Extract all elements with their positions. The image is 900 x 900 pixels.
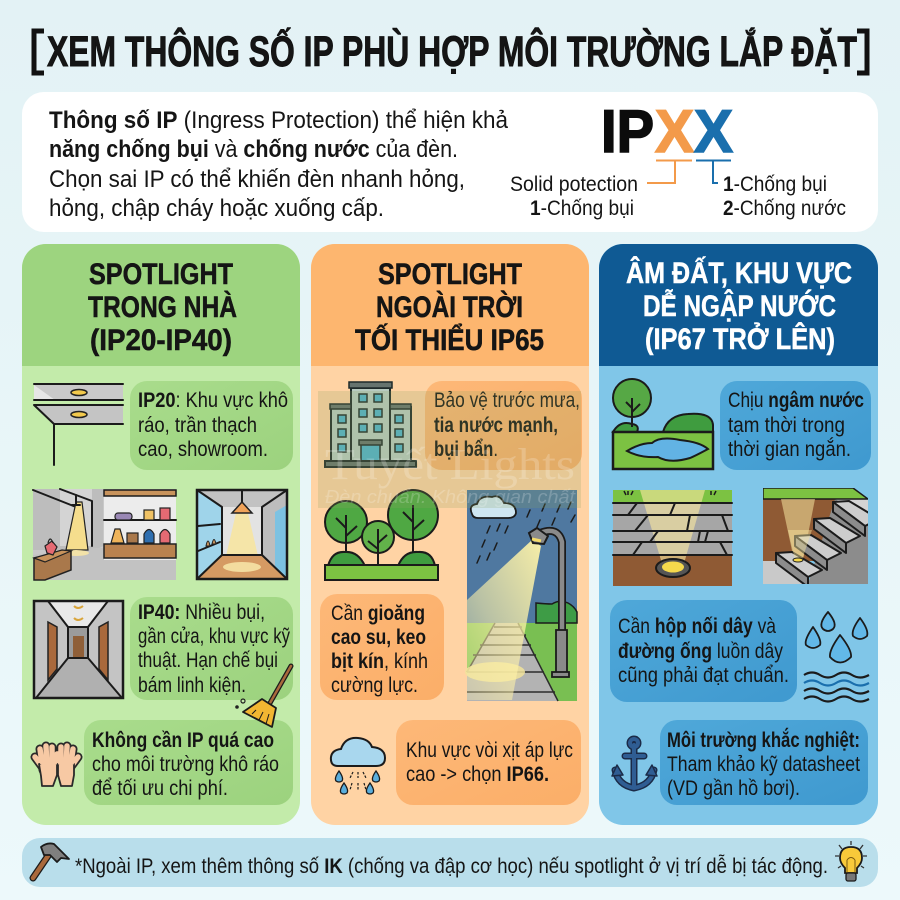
callout: IP20 (130, 381, 293, 470)
callout: rubber gasket: cao su, keo (331, 625, 426, 649)
callout: harsh environment: (VD gần hồ bơi). (667, 776, 800, 800)
icon: hammer (33, 843, 69, 878)
heading: outdoor spotlight: NGOÀI TRỜI (376, 290, 523, 324)
watermark: Tuyết Lights (325, 440, 575, 489)
icon: light bulb (835, 841, 867, 881)
panel: underground, flood-prone areas (599, 244, 879, 825)
callout: IP66: cao -> chọn IP66. (406, 762, 549, 786)
IPXX diagram: 1-Chống bụi (530, 196, 634, 220)
illustration: showroom (33, 489, 176, 580)
heading: outdoor spotlight: SPOTLIGHT (378, 258, 522, 291)
callout: protection: tia nước mạnh, (434, 413, 558, 437)
callout: rubber gasket: bịt kín, kính (331, 649, 428, 673)
callout: protection: bụi bẩn. (434, 437, 498, 461)
icon: ceiling with downlights (34, 384, 123, 465)
IPXX diagram: 1-Chống bụi (723, 172, 827, 196)
IPXX diagram: X (694, 98, 733, 165)
text block: IP definition: Chọn sai IP có thể khiến đèn nhanh hỏng, (49, 166, 465, 193)
illustration: paved ground light (613, 490, 732, 586)
callout: submersion: thời gian ngắn. (728, 436, 851, 461)
icon: water drops and waves (804, 612, 869, 702)
text block: IP definition: Thông số IP (Ingress Protection) thể hiện khả (49, 107, 509, 134)
callout: IP40: thuật. Hạn chế bụi (138, 648, 278, 672)
callout: protection (425, 381, 582, 470)
IPXX diagram: X (655, 98, 694, 165)
callout: IP20: IP20: Khu vực khô (138, 388, 288, 412)
callout: protection: Bảo vệ trước mưa, (434, 388, 580, 412)
callout: no high IP needed: Không cần IP quá cao (92, 728, 274, 752)
callout: no high IP needed: để tối ưu chi phí. (92, 776, 228, 800)
callout: junction box and conduit: đường ống luồn dây (618, 639, 783, 663)
heading: underground (626, 256, 852, 356)
callout: junction box and conduit: Cần hộp nối dây và (618, 614, 776, 638)
heading: indoor spotlight: SPOTLIGHT (89, 258, 233, 291)
watermark: Đèn chuẩn. Không gian chất (325, 487, 576, 507)
icon: building (325, 382, 416, 467)
callout: junction box and conduit: cũng phải đạt chuẩn. (618, 663, 789, 687)
watermark (318, 391, 581, 508)
callout: IP40: IP40: Nhiều bụi, (138, 600, 265, 624)
heading: indoor spotlight: (IP20-IP40) (90, 324, 232, 357)
icon: broom (235, 666, 291, 727)
callout: submersion: Chịu ngâm nước (728, 388, 864, 412)
callout: submersion: tạm thời trong (728, 413, 845, 437)
callout: IP40 (130, 597, 293, 700)
icon: anchor (612, 739, 657, 788)
illustration: lit hallway (197, 490, 287, 579)
callout: no high IP needed: cho môi trường khô ráo (92, 752, 279, 776)
callout: rubber gasket: cường lực. (331, 673, 418, 697)
callout: no high IP needed (84, 720, 293, 805)
callout: submersion (720, 381, 871, 470)
panel: IP introduction (22, 92, 878, 232)
illustration: step light (763, 488, 868, 584)
IPXX diagram: IP (601, 98, 654, 165)
heading: underground: ÂM ĐẤT, KHU VỰC (626, 256, 852, 290)
illustration: corridor (34, 601, 123, 698)
icon: pond and tree (613, 379, 713, 469)
text block: IP definition: hỏng, chập cháy hoặc xuống cấp. (49, 195, 384, 222)
callout: harsh environment: Tham khảo kỹ datasheet (667, 752, 860, 776)
callout: IP66 (396, 720, 581, 805)
panel: outdoor spotlight (311, 244, 589, 825)
heading: outdoor spotlight: TỐI THIỂU IP65 (355, 323, 544, 357)
callout: harsh environment (660, 720, 868, 805)
heading: indoor spotlight: TRONG NHÀ (88, 290, 237, 324)
illustration: street lamp in rain (465, 490, 577, 701)
IPXX diagram: Solid potection (510, 172, 638, 196)
icon: trees (325, 490, 438, 580)
callout: junction box and conduit (610, 600, 797, 702)
icon: rain cloud (331, 738, 385, 794)
callout: IP40: gần cửa, khu vực kỹ (138, 624, 290, 648)
IPXX diagram: 2-Chống nước (723, 196, 846, 220)
heading: indoor spotlight (88, 258, 237, 357)
text block: IP definition (49, 107, 509, 222)
IPXX diagram (510, 98, 846, 220)
heading: underground: DỄ NGẬP NƯỚC (643, 289, 836, 323)
callout: IP40: bám linh kiện. (138, 673, 246, 697)
callout: IP20: ráo, trần thạch (138, 413, 257, 437)
icon: open hands (35, 746, 78, 786)
panel: indoor spotlight (22, 244, 300, 825)
callout: rubber gasket: Cần gioăng (331, 601, 425, 625)
heading: underground: (IP67 TRỞ LÊN) (645, 322, 835, 356)
text block: IP definition: năng chống bụi và chống nước của đèn. (49, 136, 458, 163)
footer note bar: *Ngoài IP, xem thêm thông số IK (chống va đập cơ học) nếu spotlight ở vị trí dễ bị tác động. (75, 853, 828, 878)
heading: outdoor spotlight (355, 258, 544, 357)
callout: IP66: Khu vực vòi xịt áp lực (406, 738, 573, 762)
callout: IP20: cao, showroom. (138, 437, 268, 461)
callout: rubber gasket (320, 594, 444, 700)
footer note bar (22, 838, 878, 887)
